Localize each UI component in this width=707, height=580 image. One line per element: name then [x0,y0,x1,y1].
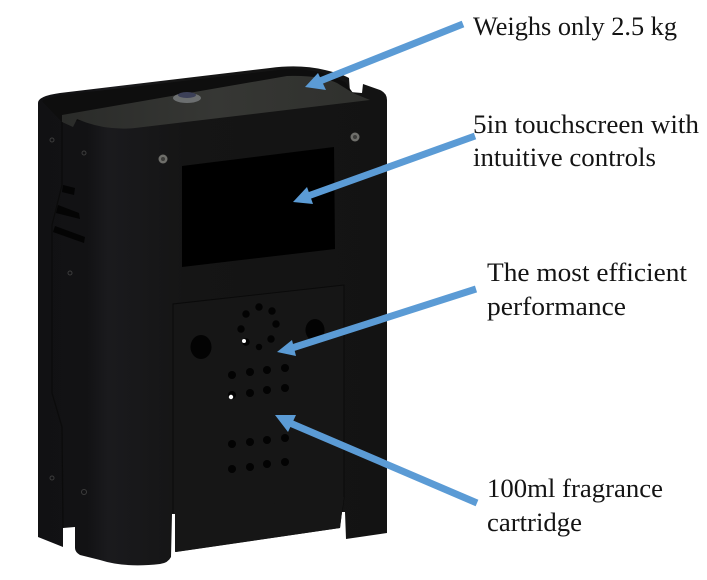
label: touchscreen: intuitive controls [473,143,656,172]
label: touchscreen: 5in touchscreen with [473,110,699,139]
lower panel [173,285,344,552]
top plate [62,76,370,129]
arrow: performance [277,289,476,356]
arrow: touchscreen [293,136,475,204]
device body [38,66,387,565]
arrow: weight [305,24,463,90]
label: cartridge: cartridge [487,508,582,537]
label: touchscreen [473,110,699,172]
label: performance: The most efficient [487,258,688,287]
arrow: cartridge [275,415,477,503]
label: cartridge [487,474,663,537]
device: fragrance unit [38,66,387,565]
left side panel edge [52,122,63,528]
touchscreen [182,147,335,267]
label: performance: performance [487,292,626,321]
side vents [53,185,85,243]
label: cartridge: 100ml fragrance [487,474,663,503]
label: performance [487,258,688,321]
top rim interior [42,69,370,122]
vent holes [190,303,324,473]
label: weight: Weighs only 2.5 kg [473,12,677,41]
screws [50,132,360,541]
power button [173,92,201,103]
